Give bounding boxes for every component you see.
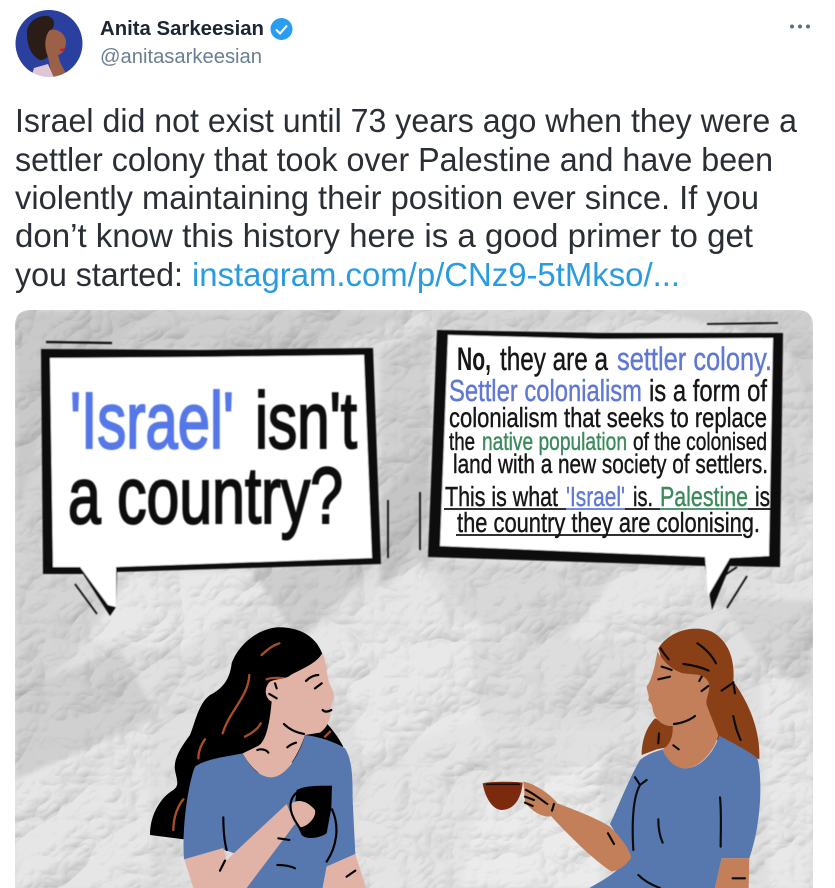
bubble text: No, xyxy=(457,341,491,377)
author handle: @anitasarkeesian xyxy=(100,46,262,68)
tweet text: instagram.com/p/CNz9-5tMkso/... xyxy=(192,256,680,293)
avatar xyxy=(15,10,83,78)
bubble text: is a form of xyxy=(649,373,767,408)
arms xyxy=(550,803,749,888)
paper crumple texture xyxy=(15,310,813,888)
line details xyxy=(220,675,355,877)
bubble text: 'Israel' xyxy=(566,481,625,512)
bubble text: native population xyxy=(482,428,627,456)
hair highlights xyxy=(173,643,330,830)
panel: illustration on crumpled paper xyxy=(15,310,813,888)
bubble text: isn't xyxy=(255,376,357,465)
bubble text: of the colonised xyxy=(633,428,767,456)
more menu dots xyxy=(790,24,810,28)
tweet text: don’t know this history here is a good primer to get xyxy=(15,217,753,254)
head and neck xyxy=(243,653,334,777)
head and neck xyxy=(647,652,718,768)
bubble text: Palestine xyxy=(660,481,748,512)
shirt xyxy=(589,736,760,888)
bubble text: Settler colonialism xyxy=(449,373,642,408)
bubble outline xyxy=(420,323,783,610)
bubble text: a country? xyxy=(68,451,343,540)
teacup xyxy=(483,782,523,810)
hair xyxy=(150,627,343,839)
bubble text: 'Israel' xyxy=(70,376,234,465)
figure: left woman with mug xyxy=(150,627,366,888)
author name: Anita Sarkeesian xyxy=(100,18,264,40)
verified badge xyxy=(270,18,292,40)
figure: right woman with teacup xyxy=(483,629,760,888)
hair xyxy=(642,629,759,759)
bubble text: the country they are colonising. xyxy=(457,507,760,538)
line details xyxy=(525,643,745,888)
speech bubble: question xyxy=(41,342,388,616)
hand xyxy=(523,782,557,817)
bubble text xyxy=(444,341,772,538)
tweet text: you started: xyxy=(15,256,183,293)
bubble outline xyxy=(41,342,388,616)
bubble text: settler colony. xyxy=(617,341,772,377)
tweet text: Israel did not exist until 73 years ago when they were a xyxy=(15,102,798,139)
bubble text: is xyxy=(755,481,770,512)
bubble text: This is what xyxy=(445,481,558,512)
bubble text xyxy=(68,376,357,540)
bubble text: the xyxy=(449,428,475,456)
tweet text: violently maintaining their position ever since. If you xyxy=(15,179,759,216)
tweet text: settler colony that took over Palestine and have been xyxy=(15,141,773,178)
paper background xyxy=(15,310,813,888)
mug and hand xyxy=(293,786,332,838)
shirt xyxy=(184,735,355,888)
tweet text xyxy=(15,102,798,293)
bubble text: they are a xyxy=(500,341,608,377)
bubble text: is. xyxy=(633,481,653,512)
speech bubble: answer xyxy=(420,323,783,610)
arms xyxy=(184,804,366,888)
